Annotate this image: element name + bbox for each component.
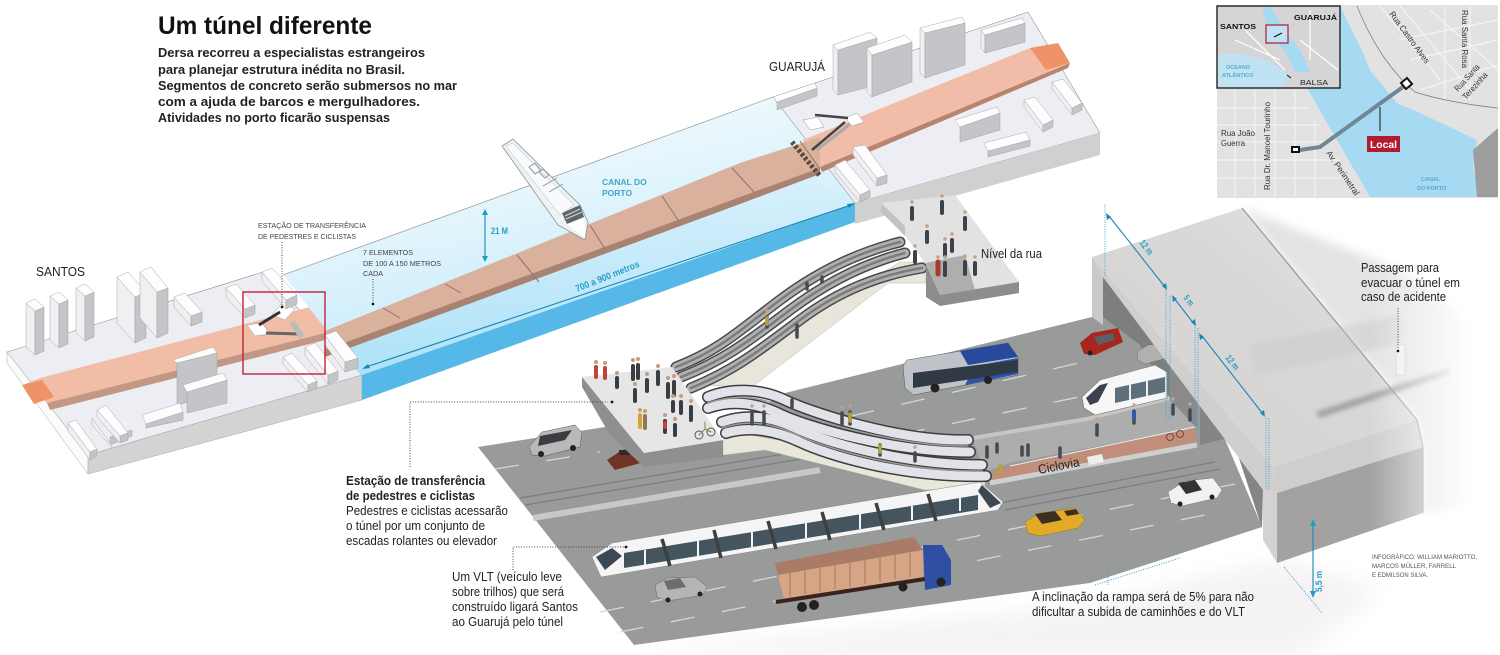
Santos buildings [26, 267, 358, 460]
inset map: ATLÂNTICO [1222, 72, 1254, 79]
Guarujá station miniature [803, 113, 864, 150]
callout: seven elements: DE 100 A 150 METROS [363, 259, 441, 268]
intro text: para planejar estrutura inédita no Brasil. [158, 62, 405, 77]
yellow car [1025, 508, 1085, 536]
panel: location map [1217, 5, 1498, 198]
white car [1168, 478, 1222, 506]
text: VLT: sobre trilhos) que será [452, 585, 564, 599]
map street names: Rua Dr. Manoel Tourinho [1262, 102, 1272, 190]
dimension: 5,5 m [1284, 519, 1325, 613]
red locator box [243, 292, 325, 374]
map street names: Rua Castro Alves [1387, 9, 1432, 65]
credits: INFOGRÁFICO: WILLIAM MARIOTTO, [1372, 552, 1477, 561]
dimension: 5,5 m: 5,5 m [1314, 571, 1325, 592]
road surface [478, 315, 1262, 645]
silver car lower [655, 577, 707, 602]
text: ramp slope [1032, 589, 1254, 619]
map street names: Rua Santa [1452, 62, 1482, 93]
panel: overview 3D model of canal crossing [7, 12, 1100, 474]
dimension guides [1105, 205, 1269, 490]
map land corner [1473, 128, 1498, 197]
ship in the channel [502, 139, 588, 240]
canal water sky plane [283, 97, 855, 375]
inset map: SANTOS [1220, 22, 1256, 31]
lane markings and rails [495, 358, 1255, 632]
callout: seven elements [363, 248, 441, 305]
lower transfer platform [582, 367, 723, 467]
brown car [607, 447, 644, 470]
map street names: Guerra [1221, 138, 1245, 148]
text: VLT [452, 570, 578, 629]
text: ramp slope: dificultar a subida de caminhões e do VLT [1032, 604, 1245, 619]
dimension: 12 m: 12 m [1137, 238, 1155, 257]
leader: transfer station [410, 401, 613, 467]
Santos station miniature [247, 303, 302, 337]
people on lower platform [596, 359, 715, 439]
text: evacuation passage: caso de acidente [1361, 289, 1446, 304]
Guarujá quay [773, 12, 1100, 224]
text: transfer station [346, 474, 508, 548]
VLT tram [592, 482, 1003, 577]
label: nível da rua: Nível da rua [981, 246, 1043, 261]
text: ramp slope: A inclinação da rampa será de 5% para não [1032, 589, 1254, 604]
map water [1307, 6, 1480, 197]
tunnel continuation behind [1242, 208, 1470, 513]
Santos road ramp [22, 303, 325, 410]
text: evacuation passage: Passagem para [1361, 260, 1440, 275]
text: evacuation passage [1361, 260, 1460, 304]
truck [775, 537, 951, 612]
tunnel roof [1092, 208, 1417, 467]
upper VLT [1082, 365, 1167, 415]
map street names: Av. Perimetral [1324, 149, 1362, 197]
text: evacuation passage: evacuar o túnel em [1361, 275, 1460, 290]
map street names: Terezinha [1460, 70, 1490, 101]
immersed tunnel segments [325, 137, 820, 357]
credits [1372, 552, 1477, 579]
intro text: Dersa recorreu a especialistas estrangeiros [158, 45, 425, 60]
text: VLT: construído ligará Santos [452, 600, 578, 614]
roof edge line [1242, 208, 1423, 447]
leader: ramp slope [1095, 558, 1180, 585]
ghost tram and smear on far wall [1250, 315, 1450, 418]
dimension: 5 m: 5 m [1181, 293, 1196, 309]
leader: passage [1397, 308, 1399, 352]
escalators down to road [708, 391, 986, 476]
concrete support upper [700, 262, 926, 387]
map streets [1217, 6, 1498, 197]
credits: E EDMILSON SILVA. [1372, 572, 1428, 579]
emergency passage door [1396, 345, 1405, 375]
Guarujá road ramp [803, 43, 1070, 172]
leader: VLT [513, 546, 627, 570]
map street names: Rua Santa Rosa [1460, 10, 1470, 68]
people on street platform [912, 196, 975, 275]
background shadow under the road [620, 560, 1380, 655]
dimension: 5 m [1172, 293, 1196, 326]
map label: canal: DO PORTO [1417, 186, 1447, 192]
intro text: Atividades no porto ficarão suspensas [158, 110, 390, 125]
Guarujá buildings [773, 17, 1082, 202]
callout: station mini label: DE PEDESTRES E CICLISTAS [258, 232, 356, 241]
map label: Local [1367, 107, 1400, 152]
bus [903, 343, 1018, 395]
credits: MARCOS MÜLLER, FARRELL [1372, 562, 1456, 570]
text: VLT: Um VLT (veículo leve [452, 570, 562, 584]
dimension: 12 m lower: 12 m [1223, 353, 1241, 372]
map label: canal: CANAL [1421, 177, 1441, 183]
text: transfer station: de pedestres e ciclistas [346, 489, 475, 503]
label: canal do porto: CANAL DO [602, 177, 647, 187]
sidewalk and bike path [973, 390, 1197, 483]
left tunnel pier [1092, 257, 1103, 325]
silver car left [529, 425, 582, 457]
title: Um túnel diferente [158, 12, 372, 40]
label: canal do porto: PORTO [602, 188, 632, 198]
text: transfer station: o túnel por um conjunto de [346, 519, 485, 533]
dimension: 12 m [1106, 213, 1167, 290]
dimension: 12 m lower [1199, 333, 1265, 417]
text: transfer station: Estação de transferência [346, 474, 486, 488]
tunnel mouth edge [1092, 257, 1277, 493]
concrete support lower [723, 434, 985, 490]
label: ciclovia: Ciclovia [1037, 454, 1081, 477]
escalators up to street level [676, 242, 922, 388]
inset map [1217, 6, 1340, 88]
people on escalators and sidewalk [752, 277, 1190, 473]
map label: Local: Local [1370, 139, 1397, 151]
text: transfer station: Pedestres e ciclistas acessarão [346, 504, 508, 518]
map markers [1291, 78, 1412, 153]
intro text: com a ajuda de barcos e mergulhadores. [158, 94, 420, 109]
silver car in tunnel [1137, 343, 1167, 364]
arrow: 21 M depth [482, 209, 488, 262]
inset map: GUARUJÁ [1294, 13, 1338, 22]
callout: station mini label: ESTAÇÃO DE TRANSFERÊNCIA [258, 221, 366, 230]
inset map: BALSA [1300, 80, 1328, 87]
label: Guarujá: GUARUJÁ [769, 59, 825, 74]
callout: seven elements: CADA [363, 269, 383, 278]
callout: station mini label [258, 221, 366, 308]
red car [1080, 328, 1123, 356]
street-level platform [881, 195, 1019, 306]
map tunnel line [1300, 84, 1407, 150]
text: VLT: ao Guarujá pelo túnel [452, 615, 563, 629]
map street names [1221, 9, 1490, 197]
map street names: Rua João [1221, 128, 1255, 138]
arrow: 700 a 900 metros [362, 203, 855, 369]
intro text [158, 45, 457, 125]
label: 21 M: 21 M [491, 226, 508, 237]
inset map: OCEANO [1226, 65, 1251, 71]
label: Santos: SANTOS [36, 264, 85, 279]
tunnel interior walls [1103, 277, 1263, 528]
back edge line of canal [283, 97, 773, 275]
panel: road and tunnel cutaway [478, 195, 1500, 645]
text: transfer station: escadas rolantes ou elevador [346, 534, 497, 548]
label: 700 a 900 metros: 700 a 900 metros [574, 259, 641, 295]
canal water front [330, 175, 855, 400]
Santos quay [7, 272, 362, 474]
callout: seven elements: 7 ELEMENTOS [363, 248, 413, 257]
tunnel front wall [1263, 420, 1423, 563]
fade to white at right [1370, 200, 1500, 530]
intro text: Segmentos de concreto serão submersos no mar [158, 78, 457, 93]
